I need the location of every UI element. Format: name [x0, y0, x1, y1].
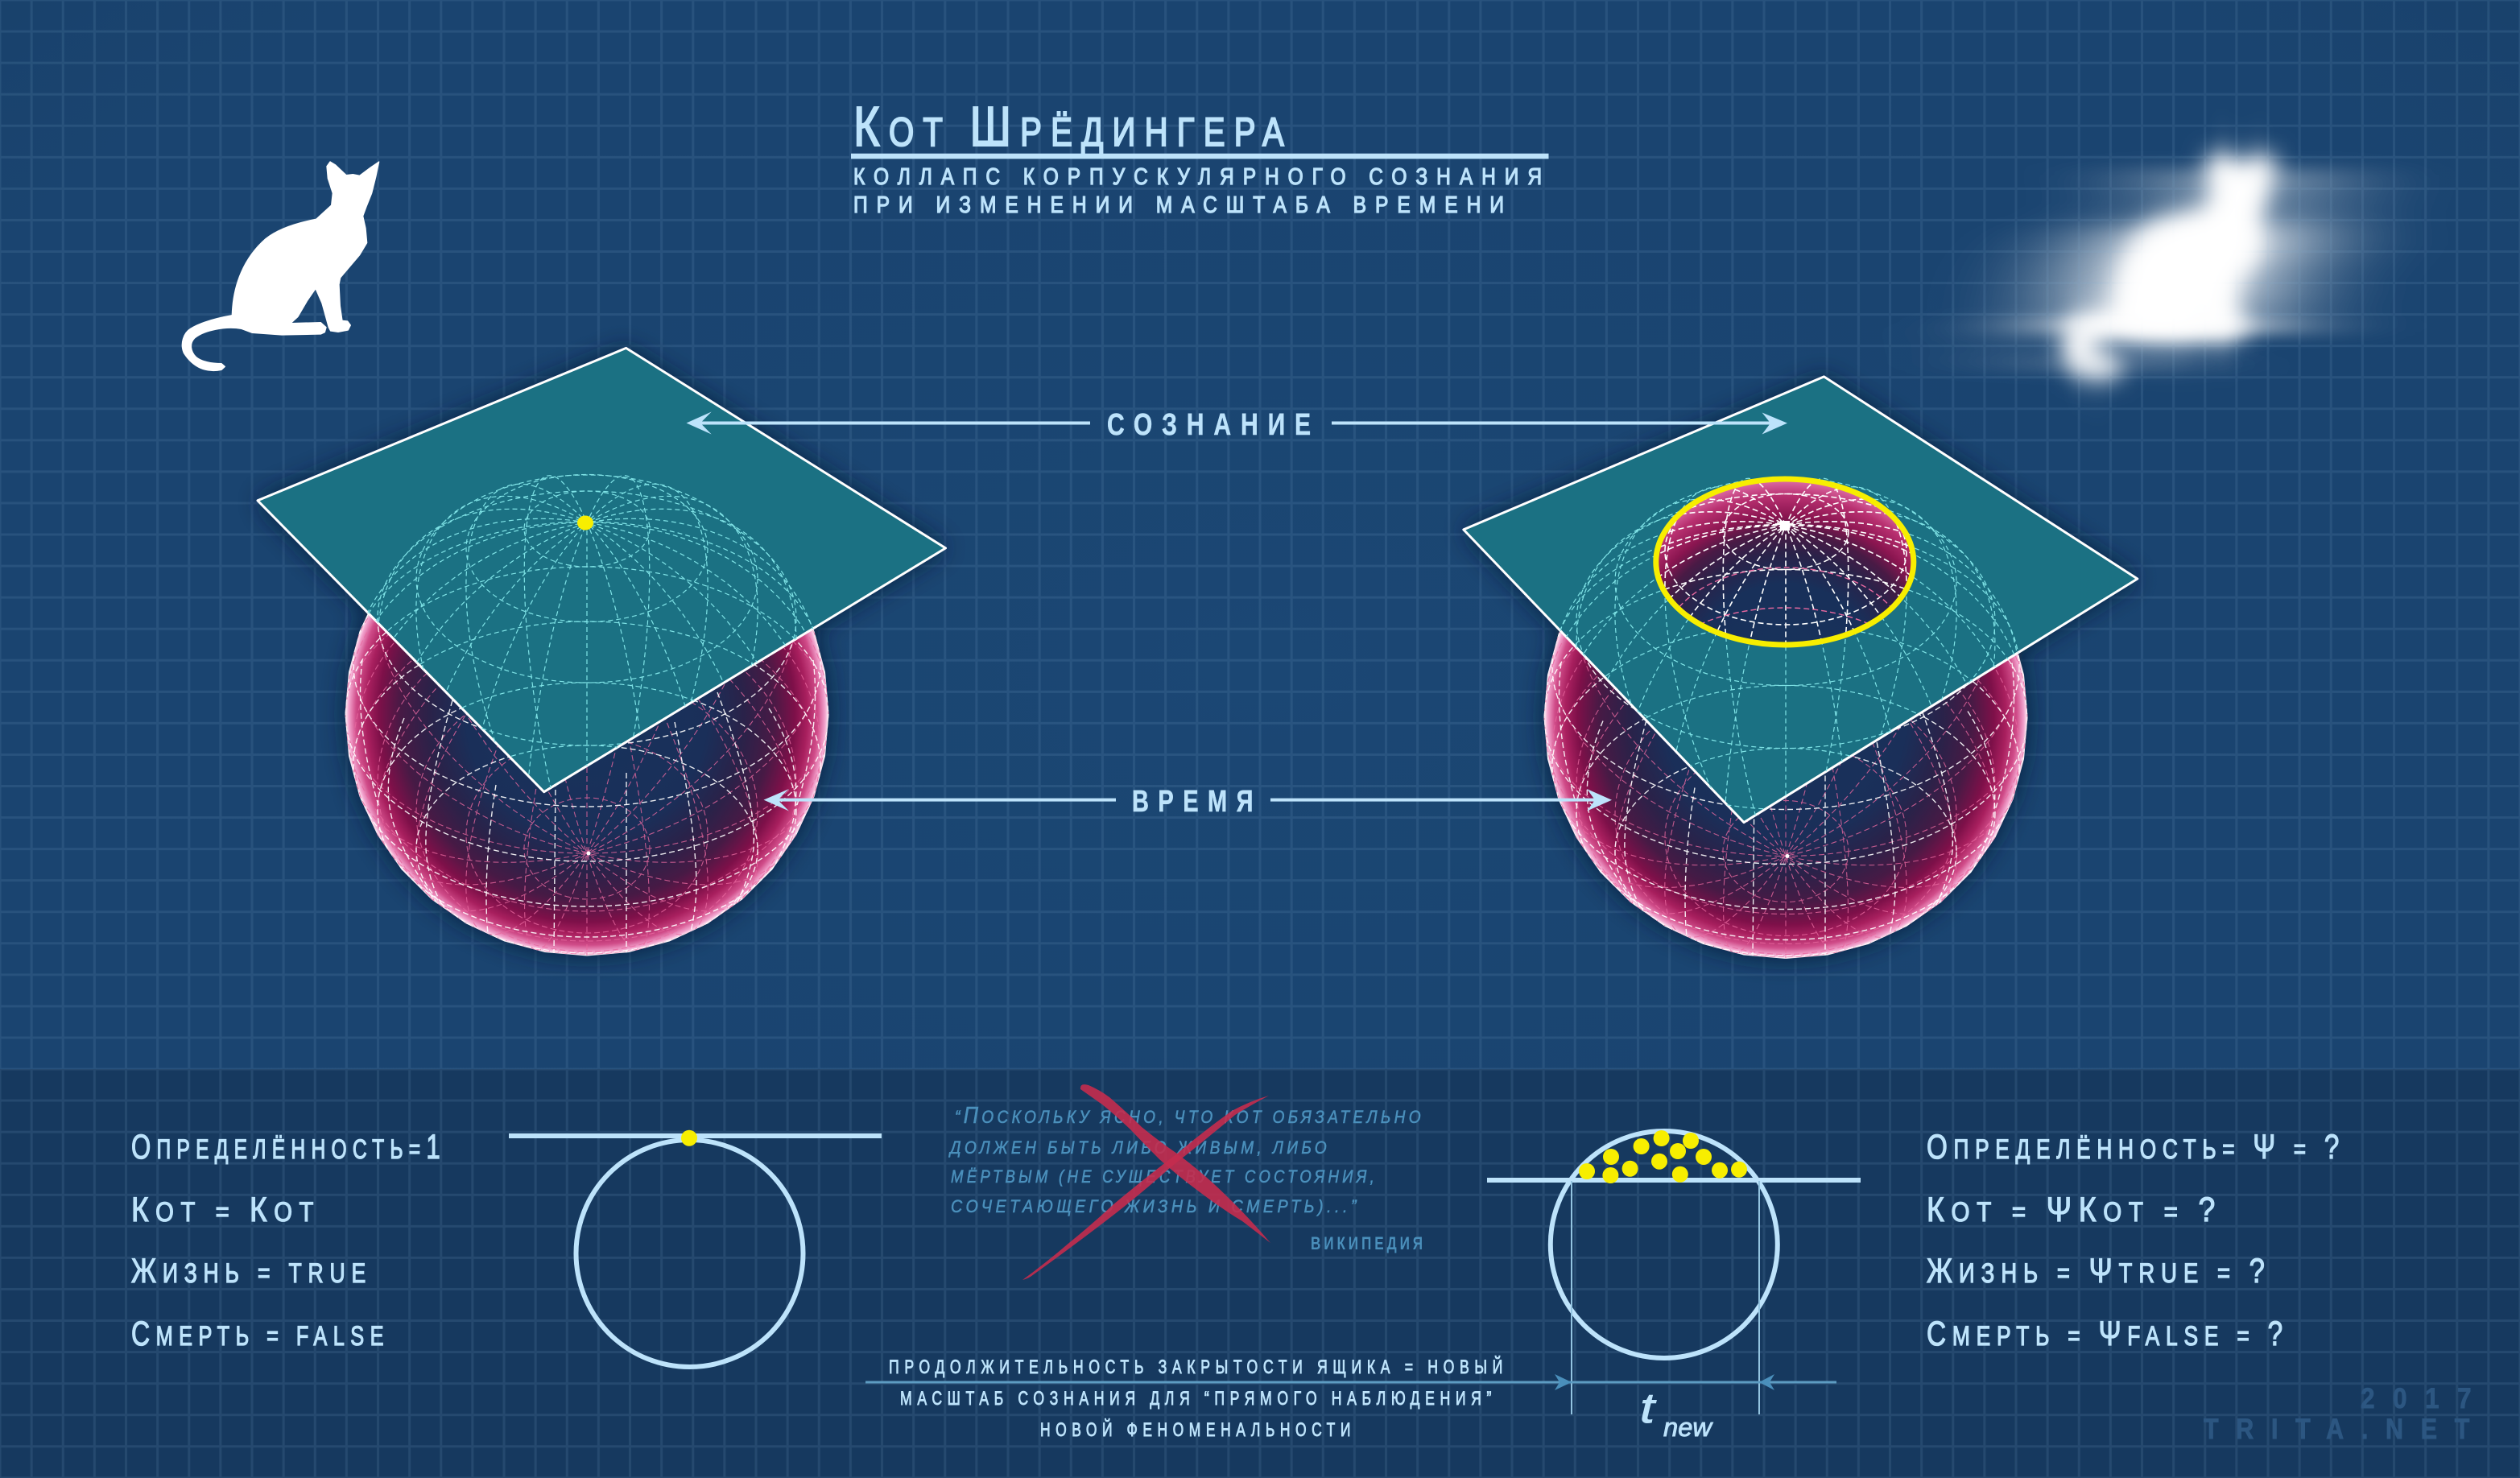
left small diagram: single point	[509, 1130, 882, 1367]
opening in the plane showing sphere interior	[1659, 481, 1911, 642]
caption under diagrams: МАСШТАБ СОЗНАНИЯ ДЛЯ “ПРЯМОГО НАБЛЮДЕНИЯ”	[900, 1388, 1497, 1410]
left plane: consciousness	[258, 348, 945, 792]
quote: ДОЛЖЕН БЫТЬ ЛИБО ЖИВЫМ, ЛИБО	[948, 1137, 1330, 1158]
watermark	[2204, 1383, 2489, 1445]
right plane: consciousness	[1464, 377, 2138, 823]
title: КОТ ШРЁДИНГЕРА	[853, 95, 1293, 158]
label: time with arrows: ВРЕМЯ	[1132, 785, 1262, 819]
watermark: 2017	[2361, 1383, 2489, 1414]
left sphere: time	[345, 613, 829, 956]
arrow: to left sphere	[763, 789, 1116, 811]
caption under diagrams: ПРОДОЛЖИТЕЛЬНОСТЬ ЗАКРЫТОСТИ ЯЩИКА = НОВЫЙ	[889, 1356, 1508, 1378]
quote source: ВИКИПЕДИЯ	[1311, 1233, 1426, 1253]
subtitle: ПРИ ИЗМЕНЕНИИ МАСШТАБА ВРЕМЕНИ	[853, 192, 1513, 218]
dimension: t new	[865, 1181, 1836, 1442]
label: time with arrows	[763, 785, 1612, 819]
quote: “ПОСКОЛЬКУ ЯСНО, ЧТО КОТ ОБЯЗАТЕЛЬНО	[955, 1103, 1424, 1129]
right diagram shadows	[1464, 377, 2138, 959]
quote	[948, 1103, 1424, 1216]
left pole: yellow dot	[577, 515, 593, 530]
arrow: to right sphere	[1270, 789, 1612, 811]
right equations: СМЕРТЬ = ΨFALSE = ?	[1927, 1315, 2289, 1353]
label: consciousness with arrows	[686, 408, 1787, 442]
left diagram shadows	[258, 348, 945, 956]
left sphere wireframe over plane	[367, 473, 813, 788]
dimension: t new: new	[1663, 1413, 1713, 1442]
arrow: to left plane	[686, 412, 1090, 435]
yellow ring	[1656, 479, 1914, 645]
quote: МЁРТВЫМ (НЕ СУЩЕСТВУЕТ СОСТОЯНИЯ,	[951, 1166, 1378, 1187]
quote: СОЧЕТАЮЩЕГО ЖИЗНЬ И СМЕРТЬ)...”	[951, 1196, 1360, 1216]
right equations: КОТ = ΨКОТ = ?	[1927, 1191, 2222, 1229]
right sphere wireframe over plane	[1560, 478, 2019, 815]
right equations: ЖИЗНЬ = ΨTRUE = ?	[1927, 1252, 2271, 1290]
left equations: СМЕРТЬ = FALSE	[131, 1315, 390, 1353]
left equations: ОПРЕДЕЛЁННОСТЬ=1	[131, 1128, 446, 1166]
subtitle: КОЛЛАПС КОРПУСКУЛЯРНОГО СОЗНАНИЯ	[853, 164, 1551, 190]
dimension: t new: t	[1640, 1385, 1657, 1432]
blurred cat core	[2070, 162, 2267, 370]
right sphere: time	[1544, 631, 2027, 959]
blurred cat glow	[2070, 162, 2267, 370]
right equations	[1927, 1128, 2345, 1353]
arrow: to right plane	[1332, 412, 1787, 435]
red cross over quote	[1022, 1084, 1270, 1280]
right equations: ОПРЕДЕЛЁННОСТЬ= Ψ = ?	[1927, 1128, 2345, 1166]
caption under diagrams	[889, 1356, 1508, 1441]
icon: white cat silhouette	[182, 162, 379, 370]
right small diagram: superposition points	[1487, 1130, 1861, 1358]
title rule	[851, 154, 1549, 159]
subtitle	[853, 164, 1551, 218]
left equations: КОТ = КОТ	[131, 1191, 320, 1229]
caption under diagrams: НОВОЙ ФЕНОМЕНАЛЬНОСТИ	[1040, 1418, 1356, 1441]
left equations: ЖИЗНЬ = TRUE	[131, 1252, 372, 1290]
label: consciousness with arrows: СОЗНАНИЕ	[1107, 408, 1320, 442]
left equations	[131, 1128, 446, 1353]
